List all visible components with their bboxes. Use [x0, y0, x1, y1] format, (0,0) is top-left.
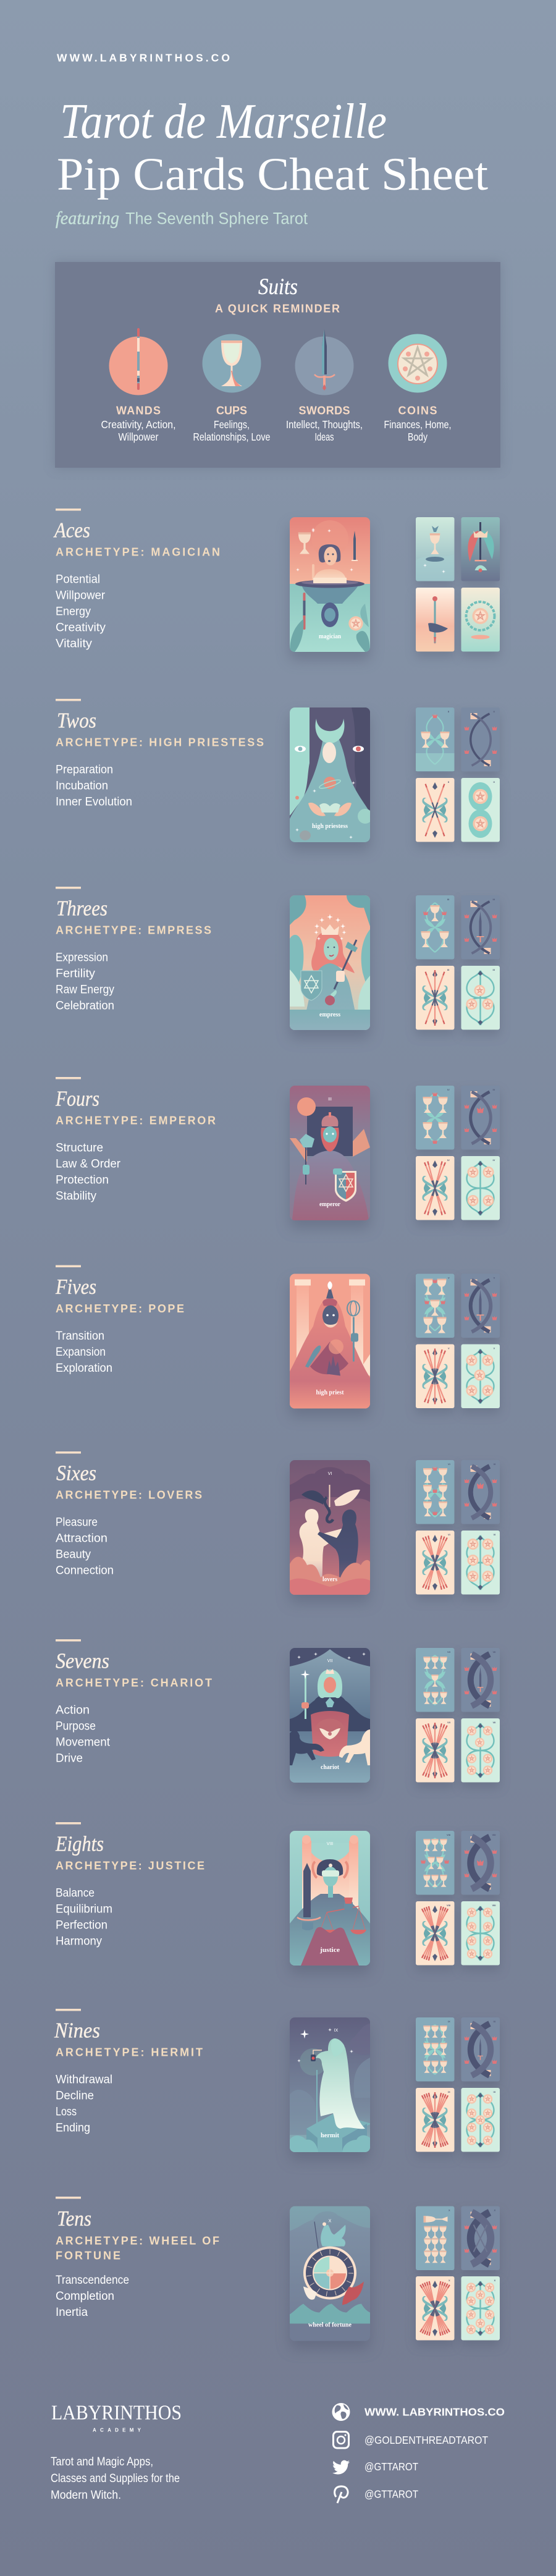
heading: eights: Eights	[55, 1831, 104, 1856]
minor card: four of cups: IV	[447, 1088, 450, 1091]
major card: emperor: emperor	[319, 1201, 341, 1208]
minor card: nine of wands: IX	[448, 2090, 450, 2093]
major card: lovers: lovers	[322, 1576, 337, 1583]
minor card: ace of swords	[461, 517, 500, 581]
minor card: two of coins	[461, 778, 500, 842]
suit label: cups: Feelings,	[214, 418, 250, 431]
minor card: three of wands	[416, 966, 455, 1029]
keywords	[56, 2073, 112, 2134]
minor card: seven of coins: VII	[493, 1721, 495, 1724]
major card: emperor: III	[328, 1097, 332, 1102]
pinterest handle: @GTTAROT	[364, 2488, 418, 2500]
keywords: Creativity	[56, 621, 106, 634]
minor card: ten of cups	[416, 2206, 455, 2270]
minor card: five of wands	[416, 1345, 455, 1408]
minor card: two of swords	[461, 707, 500, 771]
heading: tens: Tens	[57, 2206, 91, 2231]
minor card: seven of wands: VII	[447, 1721, 450, 1724]
minor card: five of swords	[461, 1274, 500, 1338]
panel: suits quick reminder	[55, 262, 500, 468]
archetype: wheel of fortune: ARCHETYPE: WHEEL OF	[56, 2235, 219, 2247]
heading: twos: Twos	[57, 708, 96, 733]
minor card: nine of coins	[461, 2088, 500, 2152]
minor card: ace of coins	[461, 588, 500, 651]
section: sevens	[56, 1639, 500, 1783]
minor card: three of cups	[416, 895, 455, 959]
title: Pip Cards Cheat Sheet	[57, 149, 488, 200]
keywords: Completion	[56, 2290, 114, 2303]
minor card: three of coins	[461, 966, 500, 1029]
minor card: seven of coins	[461, 1718, 500, 1782]
minor card: four of coins	[461, 1156, 500, 1220]
minor card: seven of swords	[461, 1648, 500, 1712]
major card: high priestess: high priestess	[312, 823, 348, 830]
suit label: coins: COINS	[398, 404, 437, 416]
suit label: swords	[286, 404, 363, 443]
minor card: nine of swords	[461, 2017, 500, 2081]
suit label: swords: SWORDS	[299, 404, 350, 416]
keywords: Inner Evolution	[56, 795, 132, 808]
keywords: Pleasure	[56, 1516, 98, 1529]
minor card: ace of wands	[416, 588, 455, 651]
minor card: two of wands: II	[448, 780, 449, 783]
keywords: Attraction	[56, 1532, 107, 1545]
minor card: ten of wands	[416, 2276, 455, 2341]
minor card: nine of coins: IX	[493, 2090, 496, 2093]
suit label: swords: Ideas	[315, 431, 334, 443]
section: fives	[55, 1265, 500, 1409]
logo: labyrinthos academy: ACADEMY	[93, 2427, 141, 2433]
major card: justice	[290, 1831, 370, 1966]
keywords: Equilibrium	[56, 1902, 112, 1915]
icon: wands	[109, 328, 168, 395]
major card: high priestess	[290, 707, 373, 842]
major card: pope	[290, 1274, 370, 1409]
minor card: three of swords: III	[493, 898, 495, 901]
section: fours	[55, 1077, 500, 1220]
archetype: empress: ARCHETYPE: EMPRESS	[56, 924, 211, 937]
minor card: two of wands	[416, 778, 455, 842]
icon: globe	[332, 2403, 350, 2421]
keywords: Harmony	[56, 1935, 102, 1948]
keywords: Raw Energy	[56, 983, 114, 996]
heading: threes: Threes	[56, 896, 107, 921]
major card: lovers	[290, 1460, 370, 1595]
minor card: ten of coins: X	[494, 2279, 495, 2282]
minor card: four of wands	[416, 1156, 455, 1220]
icon: coins	[388, 334, 447, 393]
major card: empress: empress	[319, 1011, 340, 1018]
keywords	[56, 573, 106, 650]
keywords: Purpose	[56, 1720, 96, 1733]
minor card: nine of cups: IX	[448, 2020, 450, 2023]
icon: instagram	[334, 2432, 348, 2448]
minor card: six of swords: VI	[493, 1463, 495, 1466]
keywords: Withdrawal	[56, 2073, 112, 2086]
archetype: high priestess: ARCHETYPE: HIGH PRIESTESS	[56, 737, 264, 749]
minor card: five of wands: V	[448, 1347, 450, 1349]
major card: justice: justice	[319, 1947, 340, 1954]
keywords: Decline	[56, 2089, 94, 2102]
panel subheading: A QUICK REMINDER	[215, 303, 340, 315]
keywords: Celebration	[56, 999, 114, 1012]
keywords: Drive	[56, 1752, 83, 1765]
subtitle: The Seventh Sphere Tarot	[125, 209, 308, 227]
title	[57, 95, 488, 200]
minor card: two of cups	[416, 707, 455, 771]
keywords: Expression	[56, 951, 108, 964]
minor card: five of cups	[416, 1274, 455, 1338]
minor card: six of coins	[461, 1531, 500, 1594]
minor card: three of coins: III	[493, 968, 495, 971]
title: Tarot de Marseille	[60, 95, 387, 149]
suit label: swords: Intellect, Thoughts,	[286, 418, 363, 431]
keywords	[56, 2274, 129, 2319]
keywords	[56, 1141, 121, 1202]
keywords	[56, 763, 132, 808]
suit label: coins: Finances, Home,	[384, 418, 451, 431]
keywords: Transcendence	[56, 2274, 129, 2287]
major card: chariot: chariot	[321, 1764, 340, 1771]
suit label: cups: CUPS	[216, 404, 247, 416]
website url: WWW.LABYRINTHOS.CO	[57, 52, 230, 64]
section: nines	[54, 2009, 500, 2152]
keywords	[56, 1516, 114, 1577]
minor card: four of coins: IV	[493, 1159, 495, 1162]
keywords: Movement	[56, 1736, 111, 1749]
major card: pope: high priest	[316, 1389, 344, 1396]
minor card: eight of cups	[416, 1831, 455, 1894]
heading: fives: Fives	[55, 1275, 96, 1299]
minor card: four of swords	[461, 1086, 500, 1149]
logo: labyrinthos academy: LABYRINTHOS	[51, 2401, 182, 2425]
keywords	[56, 1330, 112, 1375]
keywords: Structure	[56, 1141, 103, 1154]
minor card: ten of wands: X	[449, 2279, 450, 2282]
minor card: three of cups: III	[447, 898, 449, 901]
minor card: four of swords: IV	[493, 1088, 495, 1091]
minor card: five of coins: V	[493, 1347, 495, 1349]
keywords: Loss	[56, 2105, 77, 2118]
panel heading: Suits	[258, 274, 298, 300]
section: eights	[55, 1822, 500, 1966]
keywords	[56, 1704, 111, 1765]
minor card: two of coins: II	[493, 780, 495, 783]
major card: hermit: hermit	[321, 2132, 340, 2139]
archetype: lovers: ARCHETYPE: LOVERS	[56, 1489, 202, 1501]
minor card: six of cups: VI	[448, 1463, 450, 1466]
keywords: Protection	[56, 1173, 109, 1186]
major card: empress	[290, 895, 370, 1030]
minor card: ten of swords: X	[494, 2208, 495, 2212]
heading: nines: Nines	[54, 2018, 100, 2043]
minor card: two of swords: II	[493, 710, 495, 713]
minor card: six of cups	[416, 1460, 455, 1524]
minor card: ten of swords	[461, 2206, 500, 2270]
keywords: Exploration	[56, 1362, 112, 1375]
minor card: eight of swords: VIII	[492, 1833, 496, 1836]
section: twos	[56, 699, 500, 842]
heading: aces: Aces	[53, 518, 90, 543]
instagram handle: @GOLDENTHREADTAROT	[364, 2434, 488, 2446]
icon: twitter	[332, 2460, 350, 2474]
twitter handle: @GTTAROT	[364, 2460, 418, 2473]
suit label: wands	[101, 404, 175, 443]
icon: pinterest	[335, 2486, 348, 2503]
minor card: four of cups	[416, 1086, 455, 1149]
minor card: four of wands: IV	[447, 1159, 450, 1162]
archetype: justice: ARCHETYPE: JUSTICE	[56, 1860, 204, 1872]
heading: sixes: Sixes	[56, 1461, 96, 1485]
keywords: Potential	[56, 573, 100, 586]
keywords: Perfection	[56, 1919, 107, 1932]
minor card: eight of wands	[416, 1901, 455, 1965]
archetype: magician: ARCHETYPE: MAGICIAN	[56, 546, 220, 559]
keywords: Expansion	[56, 1346, 106, 1359]
section: threes	[56, 887, 500, 1030]
major card: chariot: VII	[327, 1659, 332, 1663]
minor card: seven of cups: VII	[447, 1650, 450, 1653]
keywords: Willpower	[56, 589, 106, 602]
minor card: seven of wands	[416, 1718, 455, 1782]
subtitle: featuring	[56, 208, 119, 229]
archetype: emperor: ARCHETYPE: EMPEROR	[56, 1115, 216, 1127]
logo: labyrinthos academy	[51, 2401, 182, 2433]
minor card: eight of cups: VIII	[447, 1833, 450, 1836]
minor card: eight of wands: VIII	[447, 1904, 450, 1907]
minor card: nine of wands	[416, 2088, 455, 2152]
subtitle	[56, 208, 308, 229]
minor card: nine of swords: IX	[493, 2020, 496, 2023]
suit label: coins	[384, 404, 451, 443]
minor card: seven of cups	[416, 1648, 455, 1712]
minor card: five of coins	[461, 1345, 500, 1408]
tagline: Modern Witch.	[51, 2489, 121, 2502]
keywords	[56, 951, 114, 1012]
suit label: cups	[193, 404, 271, 443]
section: sixes	[56, 1451, 500, 1595]
minor card: seven of swords: VII	[493, 1650, 495, 1653]
keywords: Beauty	[56, 1548, 91, 1561]
keywords: Law & Order	[56, 1157, 121, 1170]
major card: chariot	[290, 1648, 370, 1783]
minor card: ace of cups	[416, 517, 455, 581]
suit label: wands: Willpower	[119, 431, 159, 443]
keywords: Action	[56, 1704, 90, 1717]
heading: sevens: Sevens	[56, 1649, 109, 1673]
icon: swords	[295, 329, 353, 395]
minor card: three of swords	[461, 895, 500, 959]
keywords: Preparation	[56, 763, 113, 776]
tagline: Tarot and Magic Apps,	[51, 2456, 153, 2468]
section: tens	[56, 2197, 500, 2341]
minor card: two of cups: II	[448, 710, 449, 713]
major card: hermit	[290, 2017, 371, 2152]
suit label: wands: WANDS	[116, 404, 161, 416]
keywords: Balance	[56, 1886, 95, 1899]
major card: magician: magician	[319, 633, 341, 640]
minor card: six of swords	[461, 1460, 500, 1524]
keywords: Stability	[56, 1189, 96, 1202]
minor card: ten of cups: X	[449, 2208, 450, 2212]
keywords: Fertility	[56, 967, 96, 980]
tagline	[51, 2456, 180, 2502]
minor card: ten of coins	[461, 2276, 500, 2341]
minor card: eight of coins: VIII	[492, 1904, 496, 1907]
keywords: Energy	[56, 605, 91, 618]
major card: justice: VIII	[327, 1842, 333, 1846]
suit label: cups: Relationships, Love	[193, 431, 271, 443]
minor card: six of coins: VI	[493, 1533, 495, 1536]
archetype: chariot: ARCHETYPE: CHARIOT	[56, 1677, 212, 1689]
minor card: nine of cups	[416, 2017, 455, 2081]
heading: fours: Fours	[55, 1086, 99, 1111]
website link: WWW. LABYRINTHOS.CO	[364, 2406, 505, 2418]
keywords: Connection	[56, 1564, 114, 1577]
archetype: wheel of fortune	[56, 2235, 219, 2262]
section: aces	[53, 509, 500, 652]
keywords: Ending	[56, 2121, 90, 2134]
minor card: three of wands: III	[447, 968, 449, 971]
tagline: Classes and Supplies for the	[51, 2472, 180, 2485]
keywords: Transition	[56, 1330, 104, 1343]
minor card: six of wands	[416, 1531, 455, 1594]
archetype: pope: ARCHETYPE: POPE	[56, 1303, 184, 1315]
icon: cups	[203, 334, 261, 393]
keywords: Vitality	[56, 637, 93, 650]
major card: magician	[290, 517, 370, 652]
archetype: hermit: ARCHETYPE: HERMIT	[56, 2046, 203, 2059]
major card: hermit: IX	[334, 2029, 339, 2033]
keywords: Inertia	[56, 2306, 88, 2319]
major card: wheel of fortune: wheel of fortune	[308, 2322, 352, 2328]
minor card: eight of coins	[461, 1901, 500, 1965]
major card: wheel of fortune: X	[329, 2219, 332, 2223]
minor card: five of swords: V	[493, 1277, 495, 1279]
minor card: eight of swords	[461, 1831, 500, 1894]
keywords: Incubation	[56, 779, 108, 792]
keywords	[56, 1886, 112, 1948]
major card: wheel of fortune	[290, 2206, 370, 2341]
major card: lovers: VI	[328, 1472, 332, 1476]
suit label: wands: Creativity, Action,	[101, 418, 175, 431]
major card: emperor	[290, 1086, 370, 1220]
archetype: wheel of fortune: FORTUNE	[56, 2250, 120, 2262]
suit label: coins: Body	[408, 431, 428, 443]
minor card: five of cups: V	[448, 1277, 450, 1279]
minor card: six of wands: VI	[448, 1533, 450, 1536]
